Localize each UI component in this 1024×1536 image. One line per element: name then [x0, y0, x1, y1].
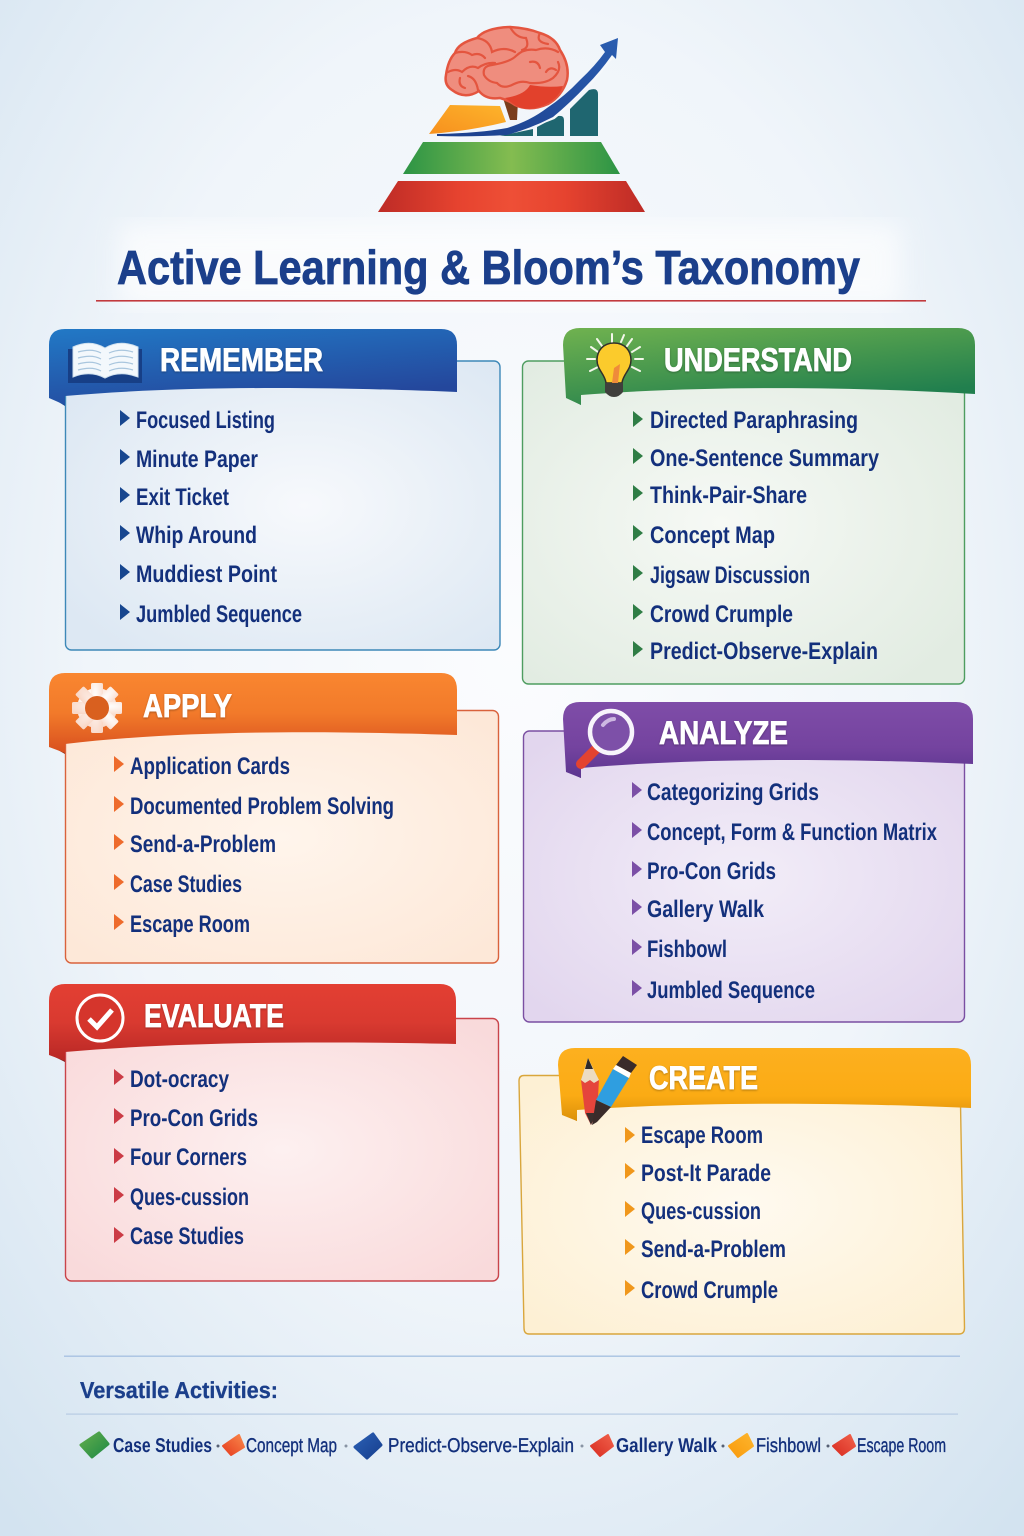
- banner: [563, 328, 975, 405]
- panel: understand: [522, 328, 975, 684]
- activity: escape room: Escape Room: [857, 1435, 946, 1457]
- list items: Pro-Con Grids: [130, 1105, 258, 1132]
- icon: pencil and marker: [581, 1056, 637, 1125]
- activity: fishbowl: Fishbowl: [756, 1435, 821, 1457]
- activity: escape room: [833, 1435, 946, 1457]
- list items: Exit Ticket: [136, 484, 229, 511]
- list items: Categorizing Grids: [647, 779, 819, 806]
- list items: Concept, Form & Function Matrix: [647, 819, 937, 846]
- growth arrow: [437, 38, 618, 136]
- list items: Four Corners: [130, 1144, 247, 1171]
- activity: concept map: Concept Map: [246, 1435, 337, 1457]
- footer heading: Versatile Activities:: [80, 1377, 278, 1403]
- list items: [120, 407, 302, 628]
- list items: Concept Map: [650, 522, 775, 549]
- list items: Predict-Observe-Explain: [650, 638, 878, 665]
- panel body: [522, 361, 964, 684]
- list items: Ques-cussion: [130, 1184, 249, 1211]
- footer: versatile activities: [64, 1356, 960, 1458]
- list items: Whip Around: [136, 522, 257, 549]
- list items: Focused Listing: [136, 407, 275, 434]
- activity: case studies: Case Studies: [113, 1435, 212, 1457]
- activity: case studies: [81, 1433, 212, 1457]
- heading: EVALUATE: [144, 997, 284, 1034]
- list items: Escape Room: [641, 1122, 763, 1149]
- panel body: [66, 710, 498, 963]
- panel body: [519, 1076, 964, 1334]
- panel body: [66, 1018, 498, 1281]
- list items: Crowd Crumple: [650, 601, 793, 628]
- list items: Case Studies: [130, 1223, 244, 1250]
- pyramid tier: green: [403, 142, 620, 174]
- title: Active Learning & Bloom’s Taxonomy: [117, 242, 860, 295]
- banner: [558, 1048, 971, 1121]
- heading: CREATE: [649, 1059, 758, 1096]
- list items: [632, 779, 937, 1004]
- list items: Directed Paraphrasing: [650, 407, 858, 434]
- activity: predict-observe-explain: [355, 1434, 574, 1458]
- icon: pyramid with brain and growth arrow: [378, 27, 645, 212]
- heading: APPLY: [143, 687, 232, 724]
- panel: create: [519, 1048, 971, 1334]
- list items: Send-a-Problem: [130, 831, 276, 858]
- banner: [49, 673, 457, 754]
- heading: REMEMBER: [160, 341, 323, 378]
- brain stem: [503, 98, 518, 120]
- list items: [633, 407, 880, 665]
- list items: Minute Paper: [136, 446, 258, 473]
- list items: [114, 753, 394, 938]
- activity: gallery walk: Gallery Walk: [616, 1435, 718, 1457]
- panel: analyze: [524, 702, 973, 1022]
- list items: Jigsaw Discussion: [650, 562, 810, 589]
- list items: Muddiest Point: [136, 561, 277, 588]
- list items: Ques-cussion: [641, 1198, 761, 1225]
- list items: Send-a-Problem: [641, 1236, 786, 1263]
- panel: remember: [49, 329, 500, 650]
- activity: fishbowl: [729, 1434, 821, 1457]
- list items: Jumbled Sequence: [136, 601, 302, 628]
- list items: Application Cards: [130, 753, 290, 780]
- panel body: [66, 361, 500, 650]
- list items: Escape Room: [130, 911, 250, 938]
- pyramid tier: red: [378, 181, 645, 212]
- list items: Pro-Con Grids: [647, 858, 776, 885]
- activity: predict-observe-explain: Predict-Observe-Explain: [388, 1435, 574, 1457]
- list items: Documented Problem Solving: [130, 793, 394, 820]
- list items: Fishbowl: [647, 936, 727, 963]
- list items: Crowd Crumple: [641, 1277, 778, 1304]
- icon: gear: [72, 683, 122, 733]
- heading: UNDERSTAND: [664, 341, 852, 378]
- panel: apply: [49, 673, 498, 963]
- title underline: [96, 300, 926, 302]
- list items: Gallery Walk: [647, 896, 765, 923]
- brain: [446, 27, 568, 109]
- icon: open book: [68, 343, 142, 383]
- list items: Post-It Parade: [641, 1160, 771, 1187]
- list items: Think-Pair-Share: [650, 482, 807, 509]
- banner: [49, 984, 456, 1062]
- activity: concept map: [223, 1435, 337, 1457]
- banner: [49, 329, 457, 406]
- icon: light bulb: [587, 334, 643, 397]
- banner: [563, 702, 973, 778]
- icon: check mark circle: [77, 995, 123, 1041]
- list items: Jumbled Sequence: [647, 977, 815, 1004]
- list items: One-Sentence Summary: [650, 445, 880, 472]
- list items: [114, 1066, 258, 1250]
- heading: ANALYZE: [659, 714, 788, 751]
- panel body: [524, 731, 964, 1022]
- panel: evaluate: [49, 984, 498, 1281]
- list items: Dot-ocracy: [130, 1066, 230, 1093]
- growth bars: [500, 89, 598, 136]
- list items: Case Studies: [130, 871, 242, 898]
- pyramid tier: orange: [429, 105, 506, 134]
- list items: [625, 1122, 786, 1304]
- icon: magnifying glass: [581, 711, 632, 764]
